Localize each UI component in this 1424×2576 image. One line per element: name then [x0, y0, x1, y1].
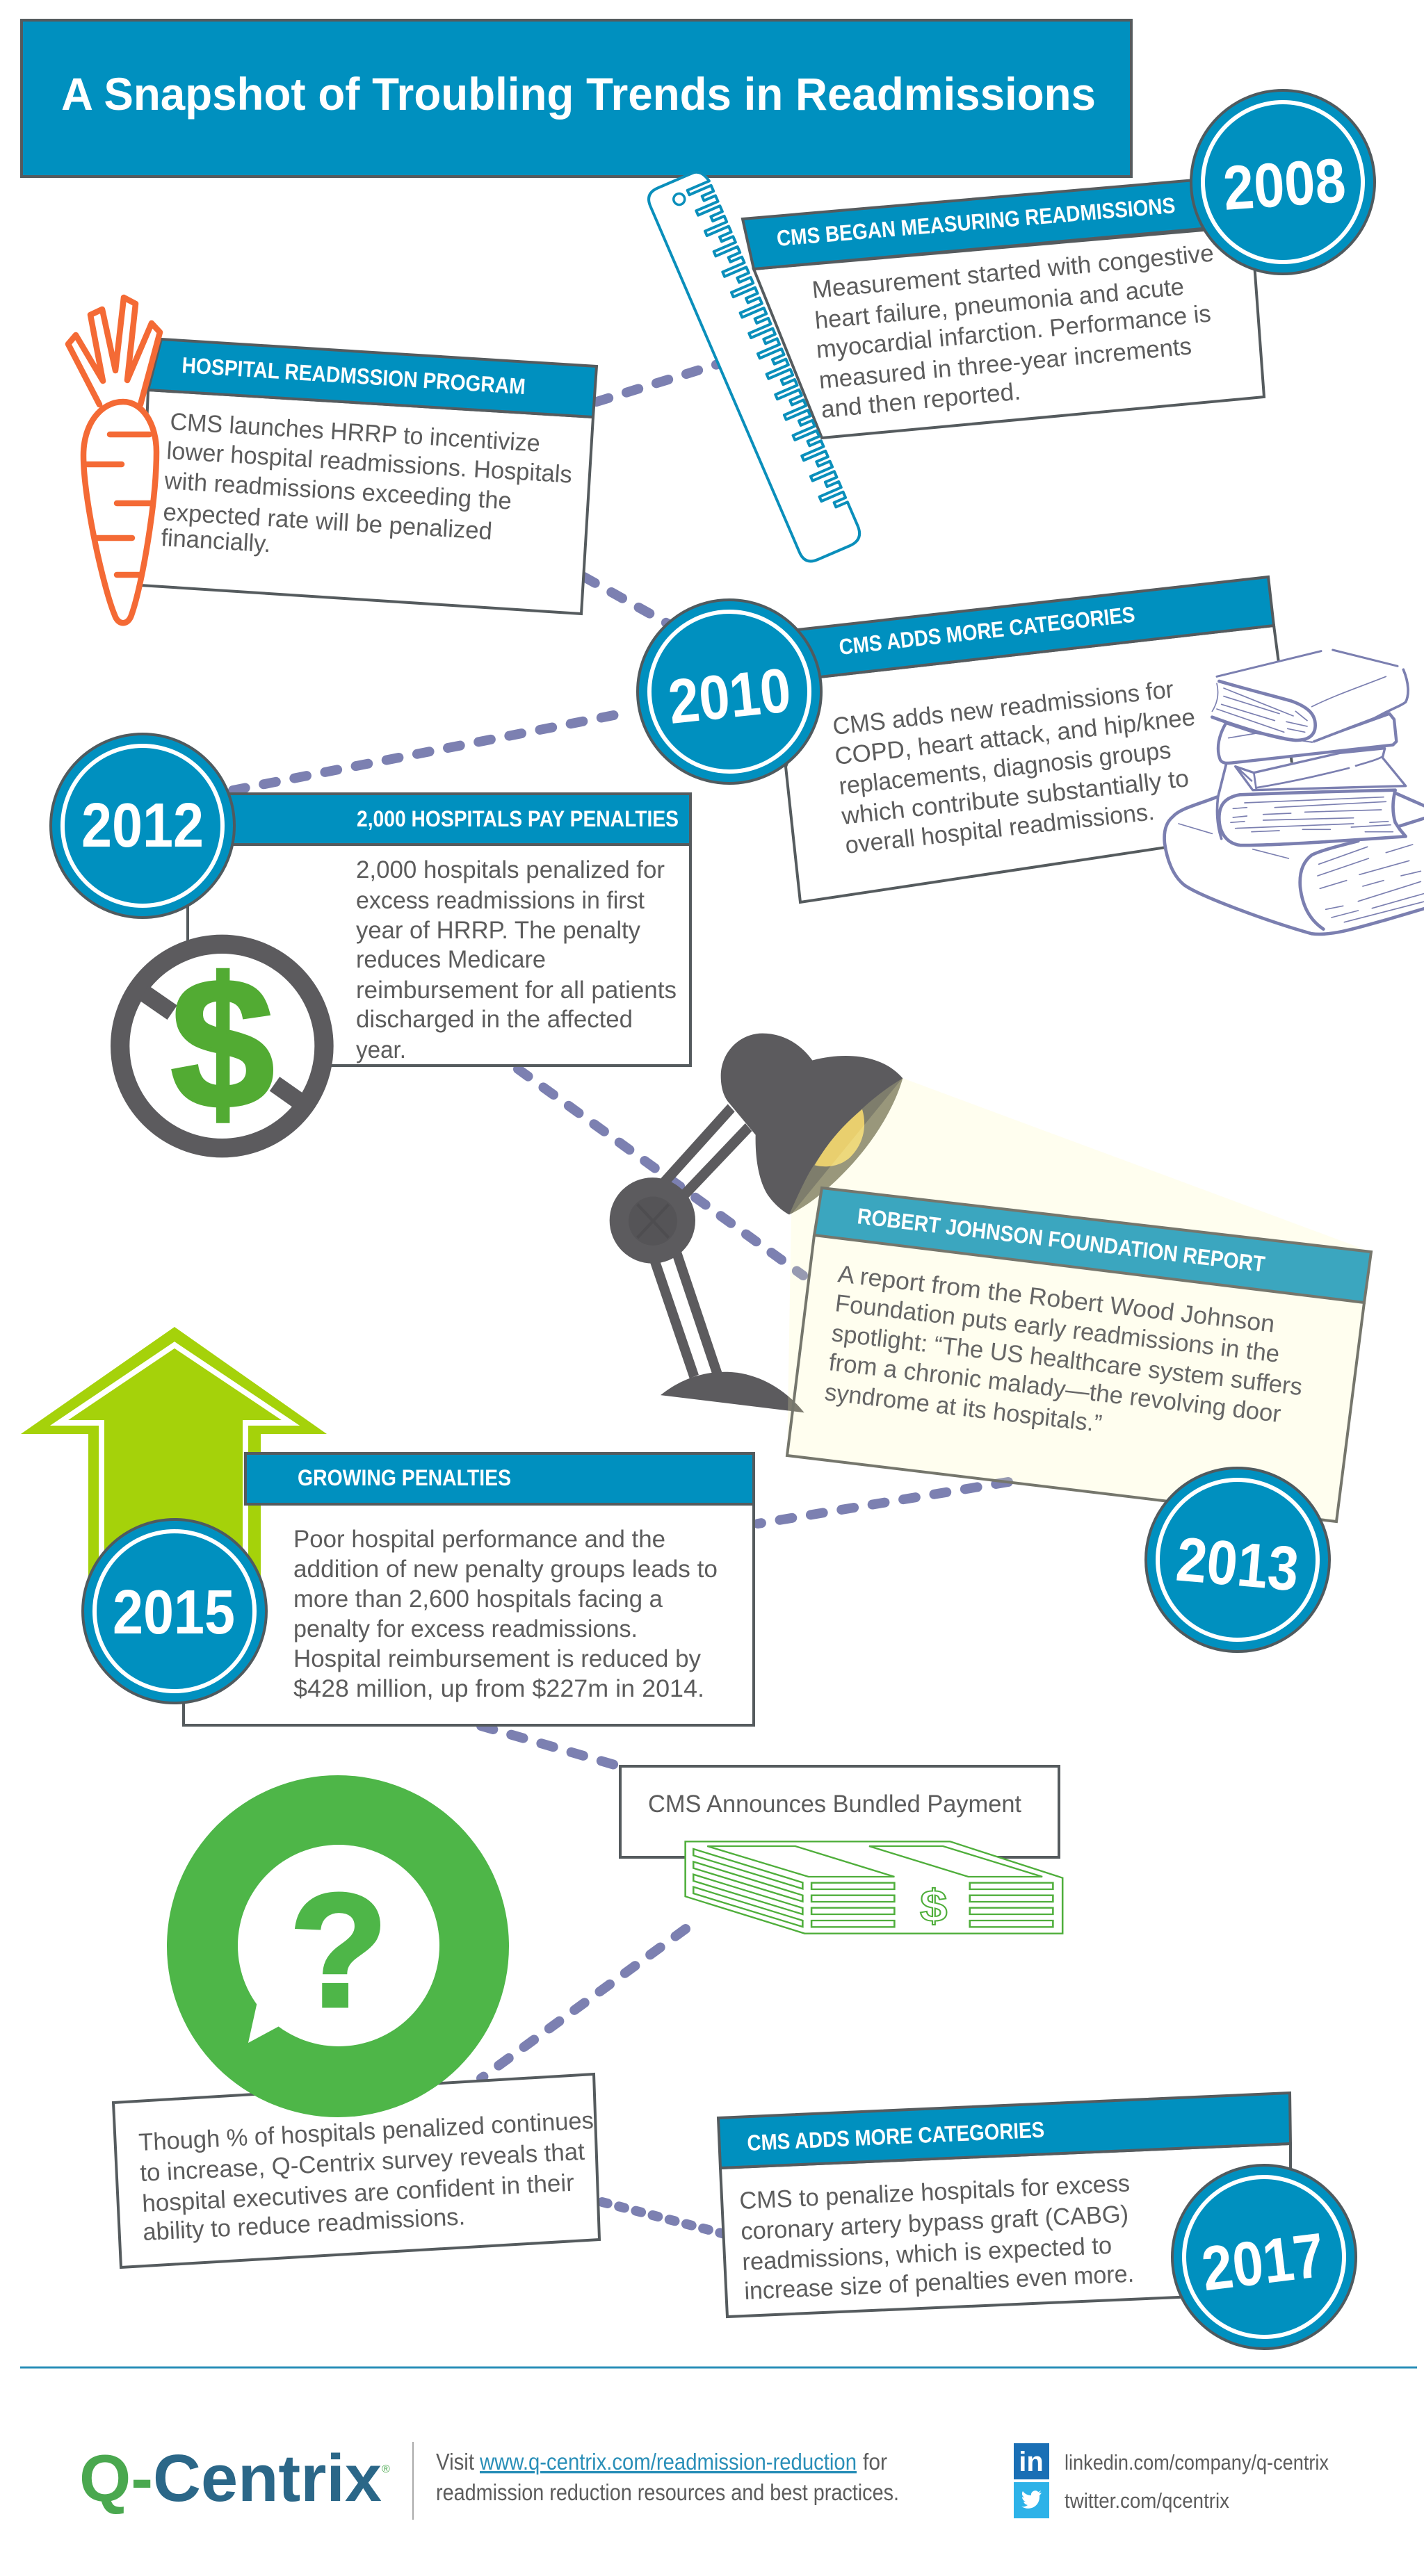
panel: Robert Johnson Foundation report: syndrome at its hospitals.”	[823, 1378, 1103, 1437]
panel: 2017 card: readmissions, which is expected to	[742, 2232, 1112, 2276]
panel: 2010 card: replacements, diagnosis groups	[838, 737, 1172, 800]
icon: Twitter	[1014, 2482, 1049, 2518]
icon: ruler	[645, 168, 864, 565]
panel: 2010 card: which contribute substantially to	[840, 765, 1190, 830]
footer divider	[412, 2442, 414, 2520]
year badge 2013: 2013	[1174, 1525, 1302, 1604]
year badge 2010	[638, 600, 821, 783]
panel: Q-Centrix survey note: hospital executives are confident in their	[141, 2169, 575, 2217]
panel: growing penalties header and text: Poor hospital performance and the	[293, 1526, 665, 1553]
year badge 2008: 2008	[1221, 146, 1348, 224]
panel: hospital readmission program	[140, 339, 597, 614]
panel: 2,000 hospitals pay penalties: year of HRRP. The penalty	[356, 917, 640, 944]
panel: hospital readmission program: with readmissions exceeding the	[163, 467, 512, 515]
panel: growing penalties header and text: $428 million, up from $227m in 2014.	[293, 1675, 704, 1702]
icon: stack of money: $	[920, 1881, 947, 1931]
text: 2008 body: heart failure, pneumonia and acute	[814, 273, 1185, 334]
panel: growing penalties header and text	[245, 1453, 754, 1702]
panel: growing penalties header and text: more than 2,600 hospitals facing a	[293, 1585, 663, 1613]
panel: 2017 card	[718, 2093, 1290, 2317]
panel: growing penalties header and text: GROWING PENALTIES	[298, 1465, 511, 1490]
text: 2008 body: measured in three-year increments	[818, 332, 1192, 394]
dashed timeline connectors	[233, 361, 1008, 2235]
footer rule	[20, 2366, 1417, 2369]
title banner	[22, 20, 1131, 177]
icon: question mark speech bubble	[167, 1775, 509, 2117]
panel: growing penalties header and text: penalty for excess readmissions.	[293, 1615, 638, 1642]
panel: Q-Centrix survey note	[113, 2074, 599, 2267]
logo: Q-Centrix: ®	[382, 2463, 390, 2475]
panel: growing penalties body	[184, 1504, 754, 1725]
panel: 2010 card: overall hospital readmissions.	[844, 798, 1156, 859]
panel: Q-Centrix survey note: to increase, Q-Centrix survey reveals that	[139, 2138, 585, 2187]
panel: Robert Johnson Foundation report: A report from the Robert Wood Johnson	[836, 1260, 1276, 1338]
panel: 2010 card: COPD, heart attack, and hip/knee	[834, 703, 1197, 770]
icon: desk lamp	[610, 1034, 903, 1412]
year badge 2012	[51, 734, 234, 918]
icon: carrot	[68, 297, 160, 623]
text: visit link	[436, 2449, 899, 2505]
text: visit link: www.q-centrix.com/readmission-reduction	[479, 2449, 857, 2475]
text: 2008 body: myocardial infarction. Performance is	[815, 300, 1212, 364]
panel: 2,000 hospitals pay penalties: year.	[356, 1036, 406, 1063]
icon: no dollar sign	[120, 940, 324, 1148]
panel: 2008 card body	[754, 226, 1264, 438]
panel: 2017 card: CMS ADDS MORE CATEGORIES	[747, 2117, 1045, 2155]
title banner: A Snapshot of Troubling Trends in Readmissions	[61, 68, 1096, 120]
panel: 2008 header: CMS BEGAN MEASURING READMISSIONS	[776, 193, 1176, 251]
year badge 2015	[83, 1519, 266, 1703]
panel: Robert Johnson Foundation report: Foundation puts early readmissions in the	[834, 1289, 1281, 1368]
panel: growing penalties header and text: addition of new penalty groups leads to	[293, 1556, 718, 1583]
icon: LinkedIn: in	[1019, 2447, 1044, 2477]
year badge 2008	[1191, 90, 1375, 274]
panel: Q-Centrix survey note: ability to reduce readmissions.	[142, 2203, 466, 2246]
panel: hospital readmission program: expected rate will be penalized	[163, 498, 493, 545]
panel: 2017 card: coronary artery bypass graft (CABG)	[741, 2201, 1129, 2245]
panel: 2,000 hospitals pay penalties: excess readmissions in first	[356, 887, 645, 914]
year badge 2017: 2017	[1198, 2221, 1328, 2304]
text: 2008 body: and then reported.	[820, 378, 1022, 423]
panel: Q-Centrix survey note: Though % of hospitals penalized continues	[138, 2107, 594, 2156]
panel: hospital readmission program: CMS launches HRRP to incentivize	[170, 408, 541, 457]
panel: 2010 card: CMS ADDS MORE CATEGORIES	[838, 601, 1136, 660]
year badge 2017	[1172, 2165, 1356, 2349]
panel: 2017 card: increase size of penalties even more.	[744, 2260, 1135, 2305]
year badge 2010: 2010	[665, 655, 794, 737]
panel: 2,000 hospitals pay penalties: 2,000 HOSPITALS PAY PENALTIES	[357, 806, 679, 831]
text: 2008 body	[811, 240, 1215, 423]
panel: Robert Johnson Foundation report	[787, 1188, 1371, 1522]
panel: Robert Johnson Foundation report: from a chronic malady—the revolving door	[827, 1348, 1283, 1428]
icon: no dollar sign: $	[171, 940, 274, 1147]
panel: 2,000 hospitals pay penalties	[188, 794, 690, 1066]
panel: 2,000 hospitals pay penalties: discharged in the affected	[356, 1006, 633, 1033]
panel: CMS announces bundled payment: CMS Announces Bundled Payment	[648, 1791, 1021, 1818]
text: visit link: for	[863, 2449, 887, 2475]
light beam and foundation report card	[787, 1078, 1371, 1522]
panel: CMS announces bundled payment	[620, 1766, 1059, 1857]
year badge 2012: 2012	[81, 791, 204, 861]
text: LinkedIn URL: linkedin.com/company/q-centrix	[1065, 2450, 1329, 2475]
year badge 2015: 2015	[113, 1578, 235, 1647]
panel: hospital readmission program: lower hospital readmissions. Hospitals	[166, 437, 573, 489]
icon: green up arrow	[21, 1327, 327, 1592]
panel: hospital readmission program: HOSPITAL READMSSION PROGRAM	[181, 352, 526, 399]
panel: 2010 card	[786, 577, 1300, 902]
panel: Robert Johnson Foundation report: spotlight: “The US healthcare system suffers	[830, 1319, 1304, 1401]
panel: Robert Johnson Foundation report: ROBERT JOHNSON FOUNDATION REPORT	[856, 1203, 1267, 1277]
panel: growing penalties header and text: Hospital reimbursement is reduced by	[293, 1645, 701, 1672]
panel: 2,000 hospitals pay penalties: 2,000 hospitals penalized for	[356, 856, 665, 883]
icon: stack of money	[686, 1841, 1062, 1934]
icon: question mark speech bubble: ?	[289, 1861, 388, 2041]
text: visit link: readmission reduction resources and best practices.	[436, 2479, 899, 2505]
icon: stack of books	[1165, 650, 1424, 934]
year badge 2013	[1146, 1468, 1329, 1652]
panel: 2017 card: CMS to penalize hospitals for excess	[739, 2170, 1131, 2215]
panel: 2010 card: CMS adds new readmissions for	[832, 676, 1175, 740]
text: Twitter URL: twitter.com/qcentrix	[1065, 2488, 1229, 2513]
icon: LinkedIn	[1014, 2443, 1049, 2479]
text: visit link: Visit	[436, 2449, 474, 2475]
logo: Q-Centrix: Q-Centrix	[79, 2441, 382, 2516]
panel: 2008 header	[743, 179, 1210, 269]
panel: 2,000 hospitals pay penalties: reduces Medicare	[356, 946, 546, 973]
text: 2008 body: Measurement started with congestive	[811, 240, 1215, 304]
panel: 2,000 hospitals pay penalties: reimbursement for all patients	[356, 977, 677, 1004]
panel: hospital readmission program: financially.	[161, 524, 272, 557]
